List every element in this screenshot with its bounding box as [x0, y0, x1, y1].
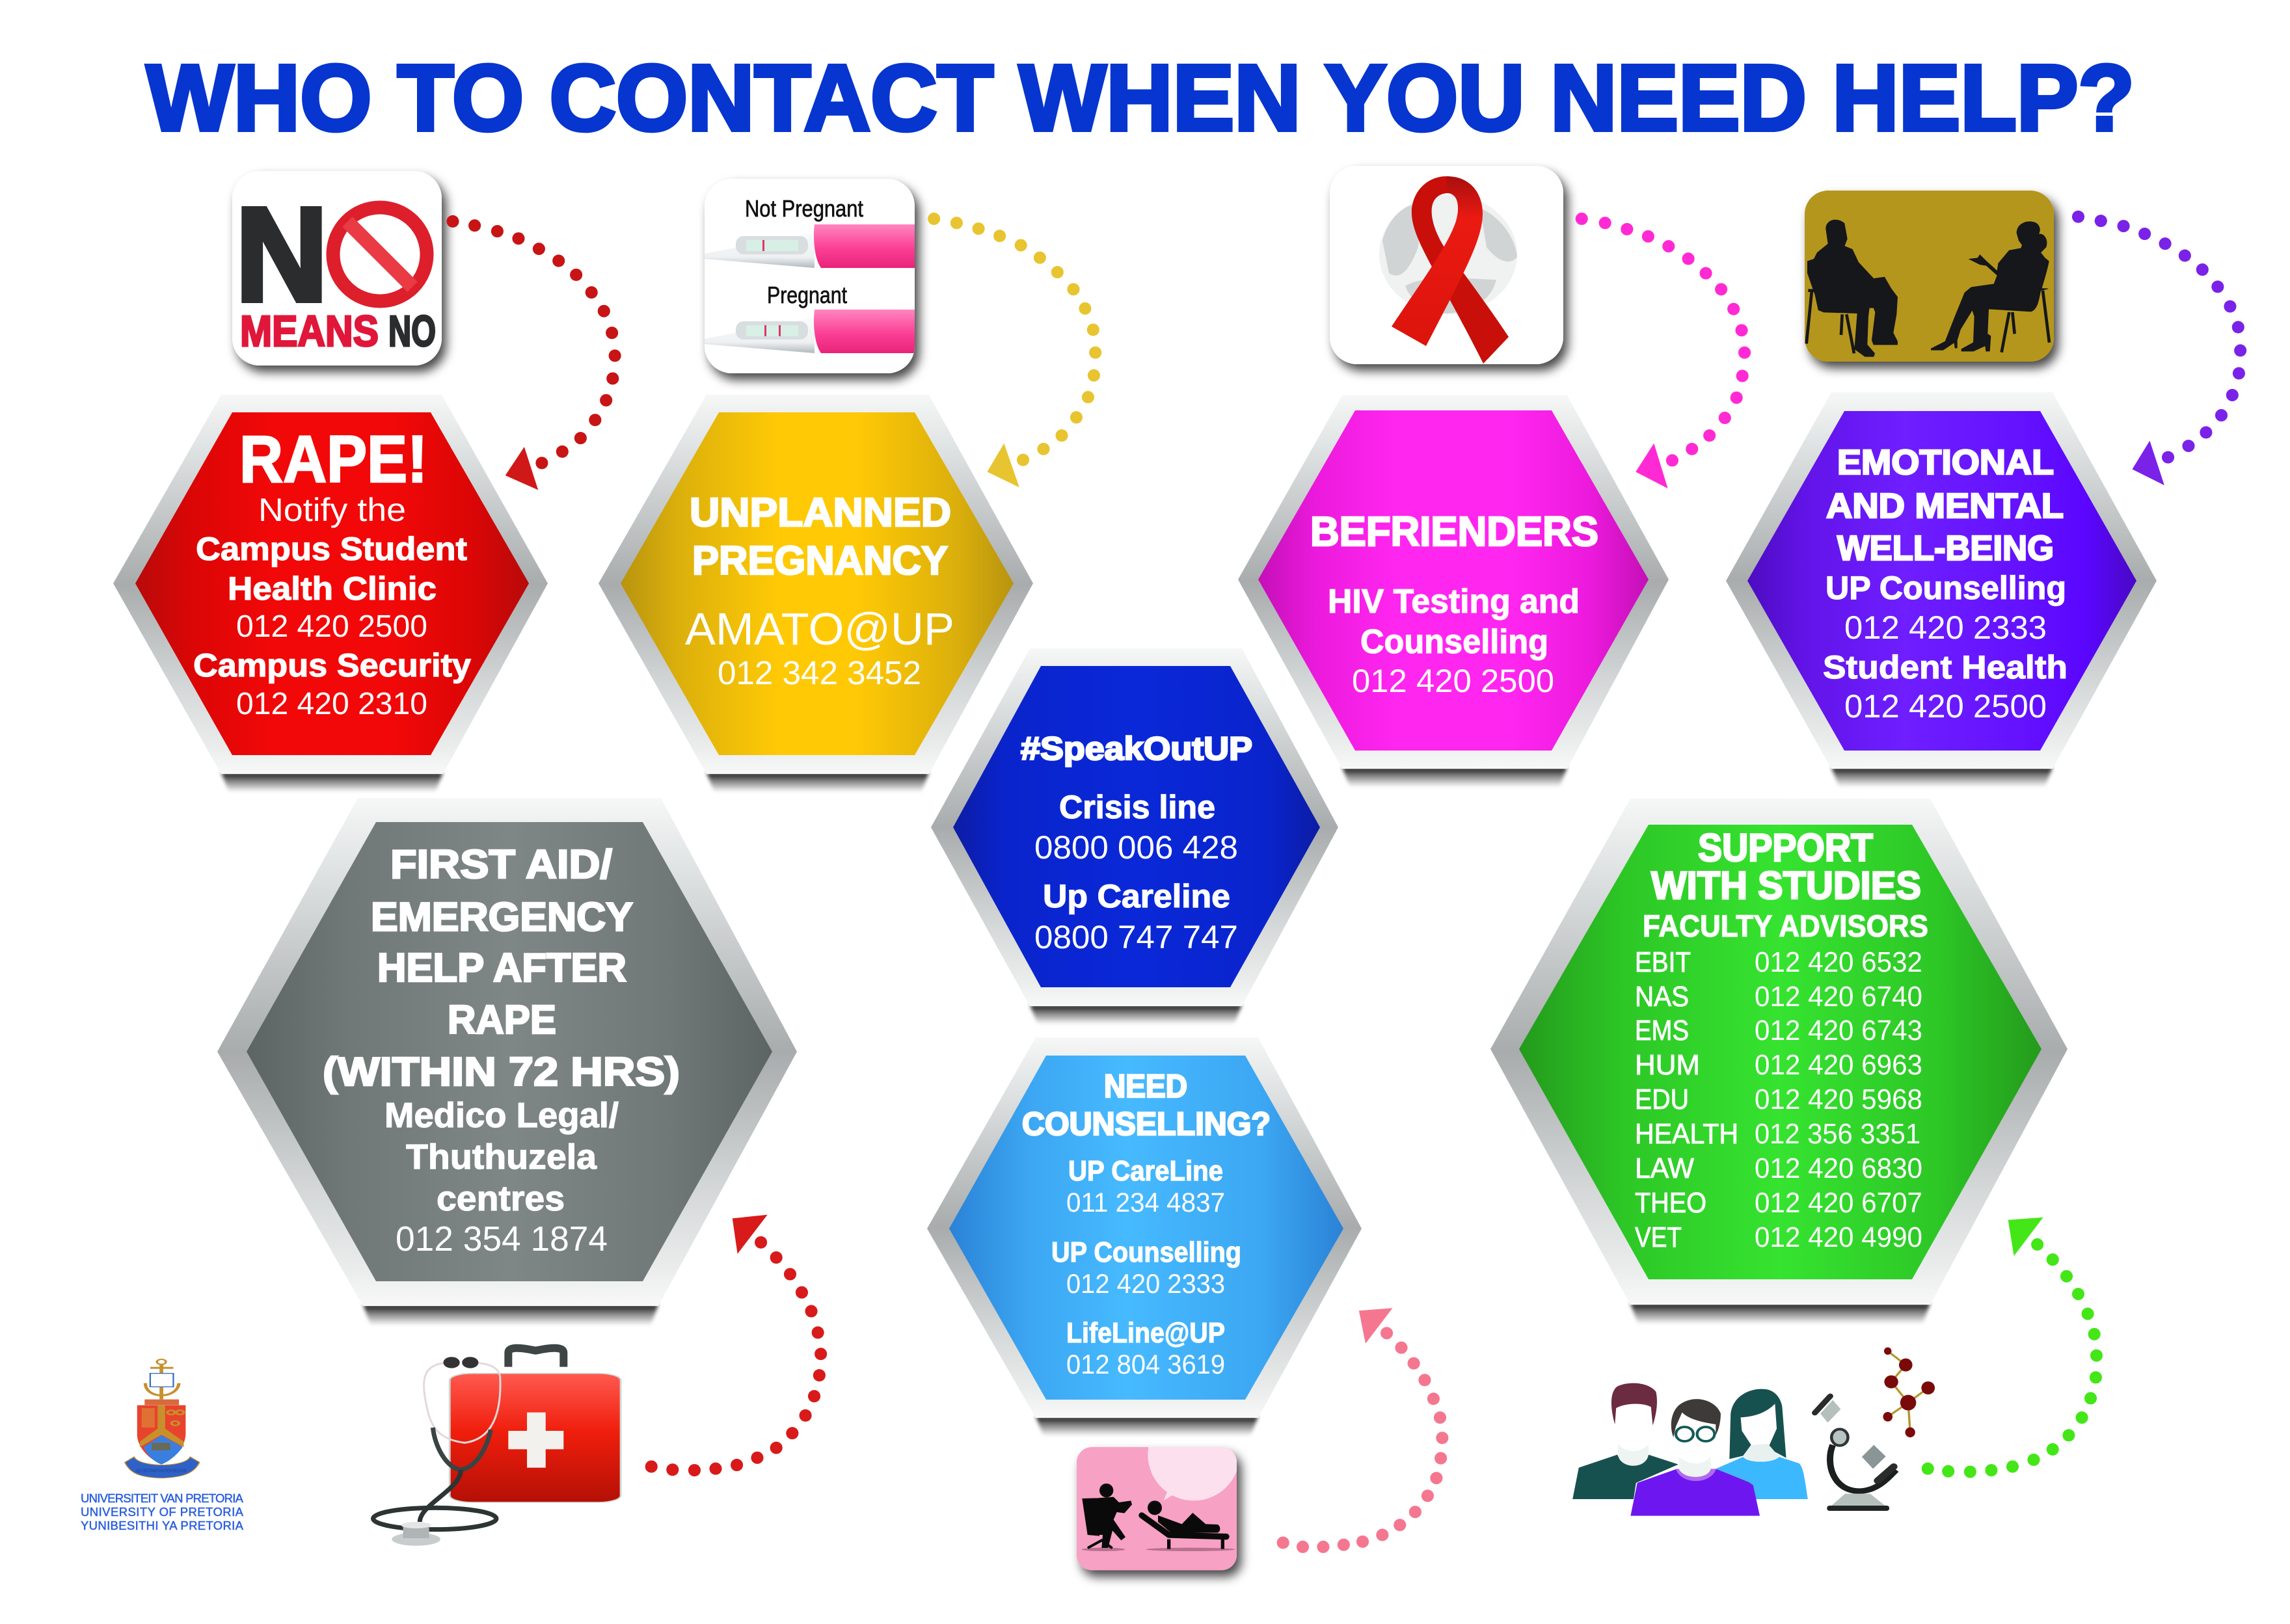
icon: pregnancy tests card: Pregnant [767, 282, 847, 308]
icon: pregnancy tests card: Not Pregnant [745, 195, 863, 222]
icon: first aid kit and stethoscope [373, 1348, 621, 1546]
panel: emotional and mental well-being hexagon: 012 420 2500 [1844, 688, 2047, 725]
icon: counselling silhouettes card [1805, 191, 2054, 362]
panel: support with studies hexagon: THEO [1635, 1187, 1706, 1219]
panel: support with studies hexagon: HEALTH [1635, 1118, 1738, 1150]
panel: support with studies hexagon: 012 420 6532 [1755, 946, 1922, 978]
panel: support with studies hexagon: 012 420 6963 [1755, 1049, 1922, 1081]
panel: emotional and mental well-being hexagon: Student Health [1823, 649, 2068, 686]
panel: SpeakOutUP hexagon [931, 648, 1338, 1024]
panel: first aid hexagon: FIRST AID/ [390, 842, 612, 887]
arrow: purple, counselling to well-being [2078, 217, 2241, 485]
panel: need counselling hexagon: 011 234 4837 [1066, 1187, 1225, 1218]
panel: emotional and mental well-being hexagon: EMOTIONAL [1837, 443, 2054, 482]
panel: unplanned pregnancy hexagon: UNPLANNED [690, 490, 951, 535]
arrow: red, no means no to rape [453, 221, 615, 490]
arrow: green, students to support hexagon [1928, 1218, 2097, 1472]
panel: befrienders hexagon: 012 420 2500 [1352, 663, 1554, 699]
panel: support with studies hexagon: HUM [1635, 1049, 1700, 1081]
panel: first aid hexagon: Medico Legal/ [384, 1096, 619, 1135]
panel: rape hexagon [113, 395, 548, 792]
icon: no means no card: MEANS [240, 307, 379, 356]
panel: support with studies hexagon: 012 420 4990 [1755, 1221, 1922, 1253]
logo: university of pretoria [125, 1359, 200, 1478]
panel: support with studies hexagon: 012 420 6740 [1755, 981, 1922, 1013]
panel: support with studies hexagon: EBIT [1635, 946, 1691, 978]
panel: need counselling hexagon: UP CareLine [1068, 1155, 1223, 1187]
panel: SpeakOutUP hexagon: 0800 006 428 [1034, 829, 1238, 866]
panel: need counselling hexagon: COUNSELLING? [1022, 1106, 1271, 1142]
panel: need counselling hexagon: LifeLine@UP [1066, 1317, 1225, 1349]
panel: SpeakOutUP hexagon: #SpeakOutUP [1021, 730, 1252, 767]
panel: first aid hexagon: 012 354 1874 [396, 1219, 608, 1258]
icon: pregnancy tests card [705, 179, 919, 373]
panel: rape hexagon: Campus Student [196, 531, 467, 567]
panel: first aid hexagon: RAPE [448, 998, 556, 1043]
panel: need counselling hexagon: 012 420 2333 [1066, 1268, 1225, 1299]
panel: emotional and mental well-being hexagon: 012 420 2333 [1844, 609, 2047, 646]
panel: support with studies hexagon: LAW [1635, 1152, 1694, 1184]
panel: rape hexagon: 012 420 2310 [236, 687, 427, 721]
panel: support with studies hexagon [1490, 799, 2068, 1324]
panel: rape hexagon: RAPE! [239, 422, 427, 496]
panel: first aid hexagon [217, 798, 797, 1325]
panel: support with studies hexagon: 012 420 6743 [1755, 1015, 1922, 1046]
arrow: magenta, ribbon to befrienders [1582, 219, 1745, 488]
panel: support with studies hexagon: FACULTY ADVISORS [1643, 909, 1928, 943]
panel: rape hexagon: 012 420 2500 [236, 609, 427, 644]
panel: support with studies hexagon: 012 420 6830 [1755, 1152, 1922, 1184]
panel: support with studies hexagon: EDU [1635, 1084, 1689, 1115]
logo text: university names [81, 1491, 244, 1532]
icon: no means no card: N [236, 180, 328, 329]
panel: support with studies hexagon: 012 420 5968 [1755, 1084, 1922, 1115]
arrow: yellow, tests to unplanned pregnancy [934, 219, 1096, 487]
icon: therapist and patient card [1077, 1409, 1240, 1570]
panel: rape hexagon: Notify the [258, 492, 406, 528]
icon: students, microscope and molecule [1572, 1348, 1935, 1516]
panel: rape hexagon: Health Clinic [228, 570, 437, 607]
panel: first aid hexagon: (WITHIN 72 HRS) [323, 1050, 680, 1095]
panel: support with studies hexagon: EMS [1635, 1015, 1689, 1046]
panel: emotional and mental well-being hexagon: UP Counselling [1825, 570, 2066, 606]
panel: unplanned pregnancy hexagon: PREGNANCY [692, 539, 948, 583]
panel: support with studies hexagon: SUPPORT [1698, 826, 1873, 870]
panel: befrienders hexagon [1238, 395, 1669, 787]
panel: first aid hexagon: Thuthuzela [406, 1138, 597, 1177]
panel: support with studies hexagon: 012 356 3351 [1755, 1118, 1920, 1150]
panel: befrienders hexagon: HIV Testing and [1328, 583, 1580, 620]
panel: need counselling hexagon: 012 804 3619 [1066, 1349, 1225, 1379]
panel: support with studies hexagon: VET [1635, 1221, 1682, 1253]
logo text: university names: YUNIBESITHI YA PRETORIA [81, 1519, 244, 1532]
panel: SpeakOutUP hexagon: Up Careline [1043, 878, 1230, 914]
panel: unplanned pregnancy hexagon: 012 342 3452 [718, 654, 921, 691]
panel: unplanned pregnancy hexagon [599, 395, 1033, 792]
panel: unplanned pregnancy hexagon: AMATO@UP [685, 604, 954, 654]
icon: red ribbon card [1330, 166, 1563, 364]
panel: need counselling hexagon: UP Counselling [1051, 1236, 1241, 1268]
logo text: university names: UNIVERSITEIT VAN PRETORIA [81, 1491, 244, 1505]
logo: university of pretoria: AD DESTINATUM PERSEQUOR [136, 1469, 187, 1473]
arrow: pink, therapy card to counselling hexagon [1283, 1308, 1442, 1547]
panel: emotional and mental well-being hexagon: WELL-BEING [1837, 529, 2054, 568]
panel: need counselling hexagon: NEED [1104, 1068, 1187, 1104]
panel: emotional and mental well-being hexagon [1726, 392, 2157, 787]
panel: first aid hexagon: HELP AFTER [377, 946, 626, 991]
logo text: university names: UNIVERSITY OF PRETORIA [81, 1505, 244, 1519]
title: WHO TO CONTACT WHEN YOU NEED HELP? [146, 46, 2135, 150]
panel: first aid hexagon: centres [437, 1179, 565, 1218]
icon: no means no card: NO [388, 307, 436, 356]
panel: support with studies hexagon: NAS [1635, 981, 1689, 1013]
panel: befrienders hexagon: Counselling [1360, 623, 1548, 661]
panel: emotional and mental well-being hexagon: AND MENTAL [1826, 486, 2064, 526]
panel: rape hexagon: Campus Security [193, 647, 471, 684]
icon: no means no card [232, 171, 442, 366]
panel: befrienders hexagon: BEFRIENDERS [1310, 508, 1598, 555]
panel: support with studies hexagon: 012 420 6707 [1755, 1187, 1922, 1219]
panel: need counselling hexagon [927, 1037, 1362, 1436]
panel: SpeakOutUP hexagon: Crisis line [1059, 789, 1215, 825]
panel: support with studies hexagon: WITH STUDIES [1651, 864, 1921, 907]
panel: SpeakOutUP hexagon: 0800 747 747 [1034, 919, 1238, 955]
arrow: red, first aid kit to first aid hexagon [651, 1215, 821, 1471]
panel: first aid hexagon: EMERGENCY [371, 895, 633, 940]
